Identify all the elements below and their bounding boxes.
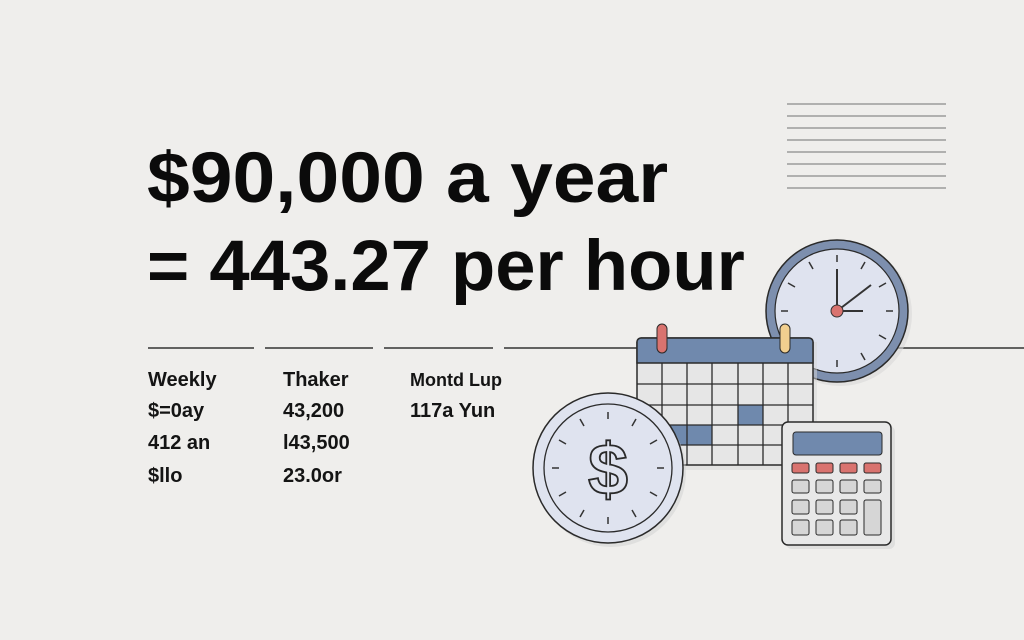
table column: thaker: 23.0or <box>283 465 342 487</box>
table column: weekly: $llo <box>148 465 182 487</box>
table column: weekly: $=0ay <box>148 400 204 422</box>
title line 2: = 443.27 per hour <box>147 227 745 306</box>
table column: weekly: Weekly <box>148 369 217 391</box>
icon: calendar <box>637 324 817 470</box>
table column: monthly: Montd Lup <box>410 370 502 390</box>
title line 1: $90,000 a year <box>147 139 668 218</box>
table column: thaker: l43,500 <box>283 432 350 454</box>
icon: dollar coin: $ <box>588 430 628 510</box>
table column: thaker: Thaker <box>283 369 349 391</box>
table column: monthly: 117a Yun <box>410 400 495 422</box>
table column: thaker <box>283 369 350 487</box>
icon: clock <box>766 240 912 386</box>
table column: monthly <box>410 370 502 422</box>
table column: thaker: 43,200 <box>283 400 344 422</box>
icon: dollar coin <box>533 393 686 547</box>
table column: weekly <box>148 369 217 487</box>
icon: calculator <box>782 422 895 549</box>
table column: weekly: 412 an <box>148 432 210 454</box>
